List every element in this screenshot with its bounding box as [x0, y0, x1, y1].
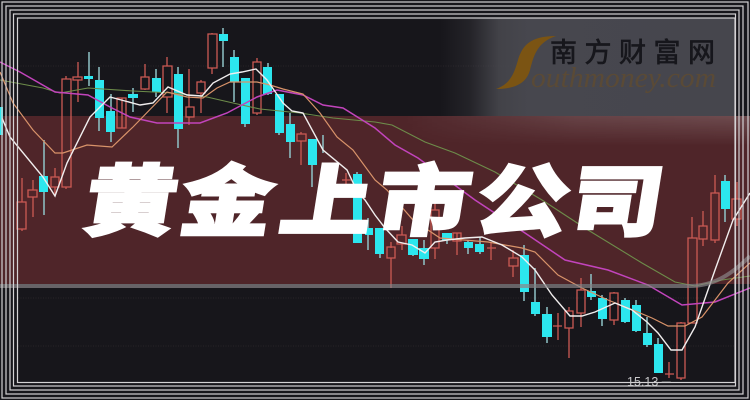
- line: purple moving average: [0, 62, 750, 305]
- price label: 15.13 low: 15.13 ─: [627, 375, 671, 389]
- title: 金: [174, 160, 280, 246]
- title: 市: [371, 160, 477, 246]
- logo text: Chinese name: 南方财富网: [550, 38, 722, 68]
- title: 公: [470, 160, 576, 246]
- watermark panel: [440, 18, 736, 116]
- line: orange moving average: [0, 72, 750, 326]
- divider: gray band edge: [0, 256, 750, 286]
- logo text: domain: outhmoney.com: [531, 63, 716, 94]
- line: green moving average: [0, 80, 750, 286]
- icon: brown S swoosh: [496, 36, 556, 89]
- title: 司: [564, 160, 670, 246]
- logo: southmoney: [496, 36, 722, 94]
- title: 黄: [78, 160, 184, 246]
- title: 上: [274, 160, 380, 246]
- line: white moving average: [2, 69, 750, 350]
- band: red highlight strip: [0, 116, 750, 284]
